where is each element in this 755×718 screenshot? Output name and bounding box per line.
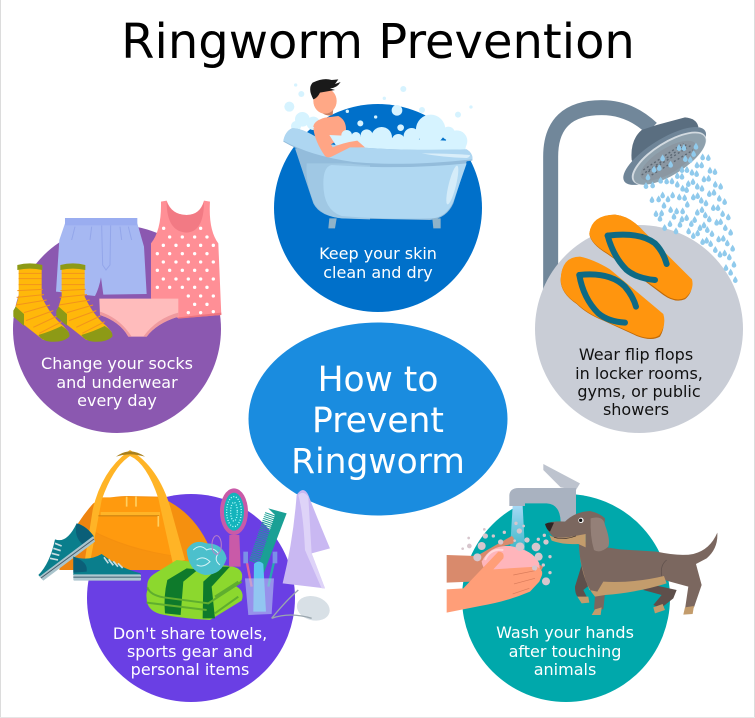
panel: central topic: How to (318, 360, 438, 400)
panel: central topic: Ringworm (291, 442, 465, 482)
icon: man in bathtub (283, 79, 473, 228)
panel: keep skin clean: Keep your skin (319, 244, 437, 263)
panel: change socks and underwear (13, 201, 221, 433)
panel: change socks and underwear: and underwear (56, 373, 178, 392)
panel: don't share personal items: Don't share towels, (113, 624, 267, 643)
panel: central topic (248, 322, 508, 516)
title: Ringworm Prevention (121, 14, 635, 70)
icon: gym bag, shoes, towels and toiletries (38, 450, 333, 624)
panel: flip flops and shower: gyms, or public (577, 382, 701, 401)
panel: change socks and underwear: every day (77, 391, 157, 410)
panel: don't share personal items (38, 450, 333, 702)
panel: keep skin clean (274, 79, 482, 312)
panel: wash hands after touching animals: Wash your hands (496, 623, 634, 642)
icon: shower head (615, 117, 714, 195)
panel: keep skin clean: clean and dry (323, 263, 433, 282)
icon: clothes (13, 201, 221, 342)
panel: don't share personal items: personal items (131, 660, 249, 679)
panel: change socks and underwear: Change your socks (41, 354, 193, 373)
panel: flip flops and shower (535, 108, 743, 433)
panel: wash hands after touching animals: after touching (509, 642, 621, 661)
panel: wash hands after touching animals: animals (534, 660, 596, 679)
icon: flip flops (561, 215, 693, 339)
panel: wash hands after touching animals (447, 464, 717, 702)
panel: flip flops and shower: showers (603, 400, 669, 419)
panel: don't share personal items: sports gear and (127, 642, 253, 661)
icon: faucet, hands and dachshund (447, 464, 717, 615)
panel: flip flops and shower: Wear flip flops (579, 345, 693, 364)
panel: central topic: Prevent (312, 401, 444, 441)
panel: flip flops and shower: in locker rooms, (575, 364, 703, 383)
icon: shower pipe (551, 108, 652, 290)
water drops (644, 143, 738, 283)
